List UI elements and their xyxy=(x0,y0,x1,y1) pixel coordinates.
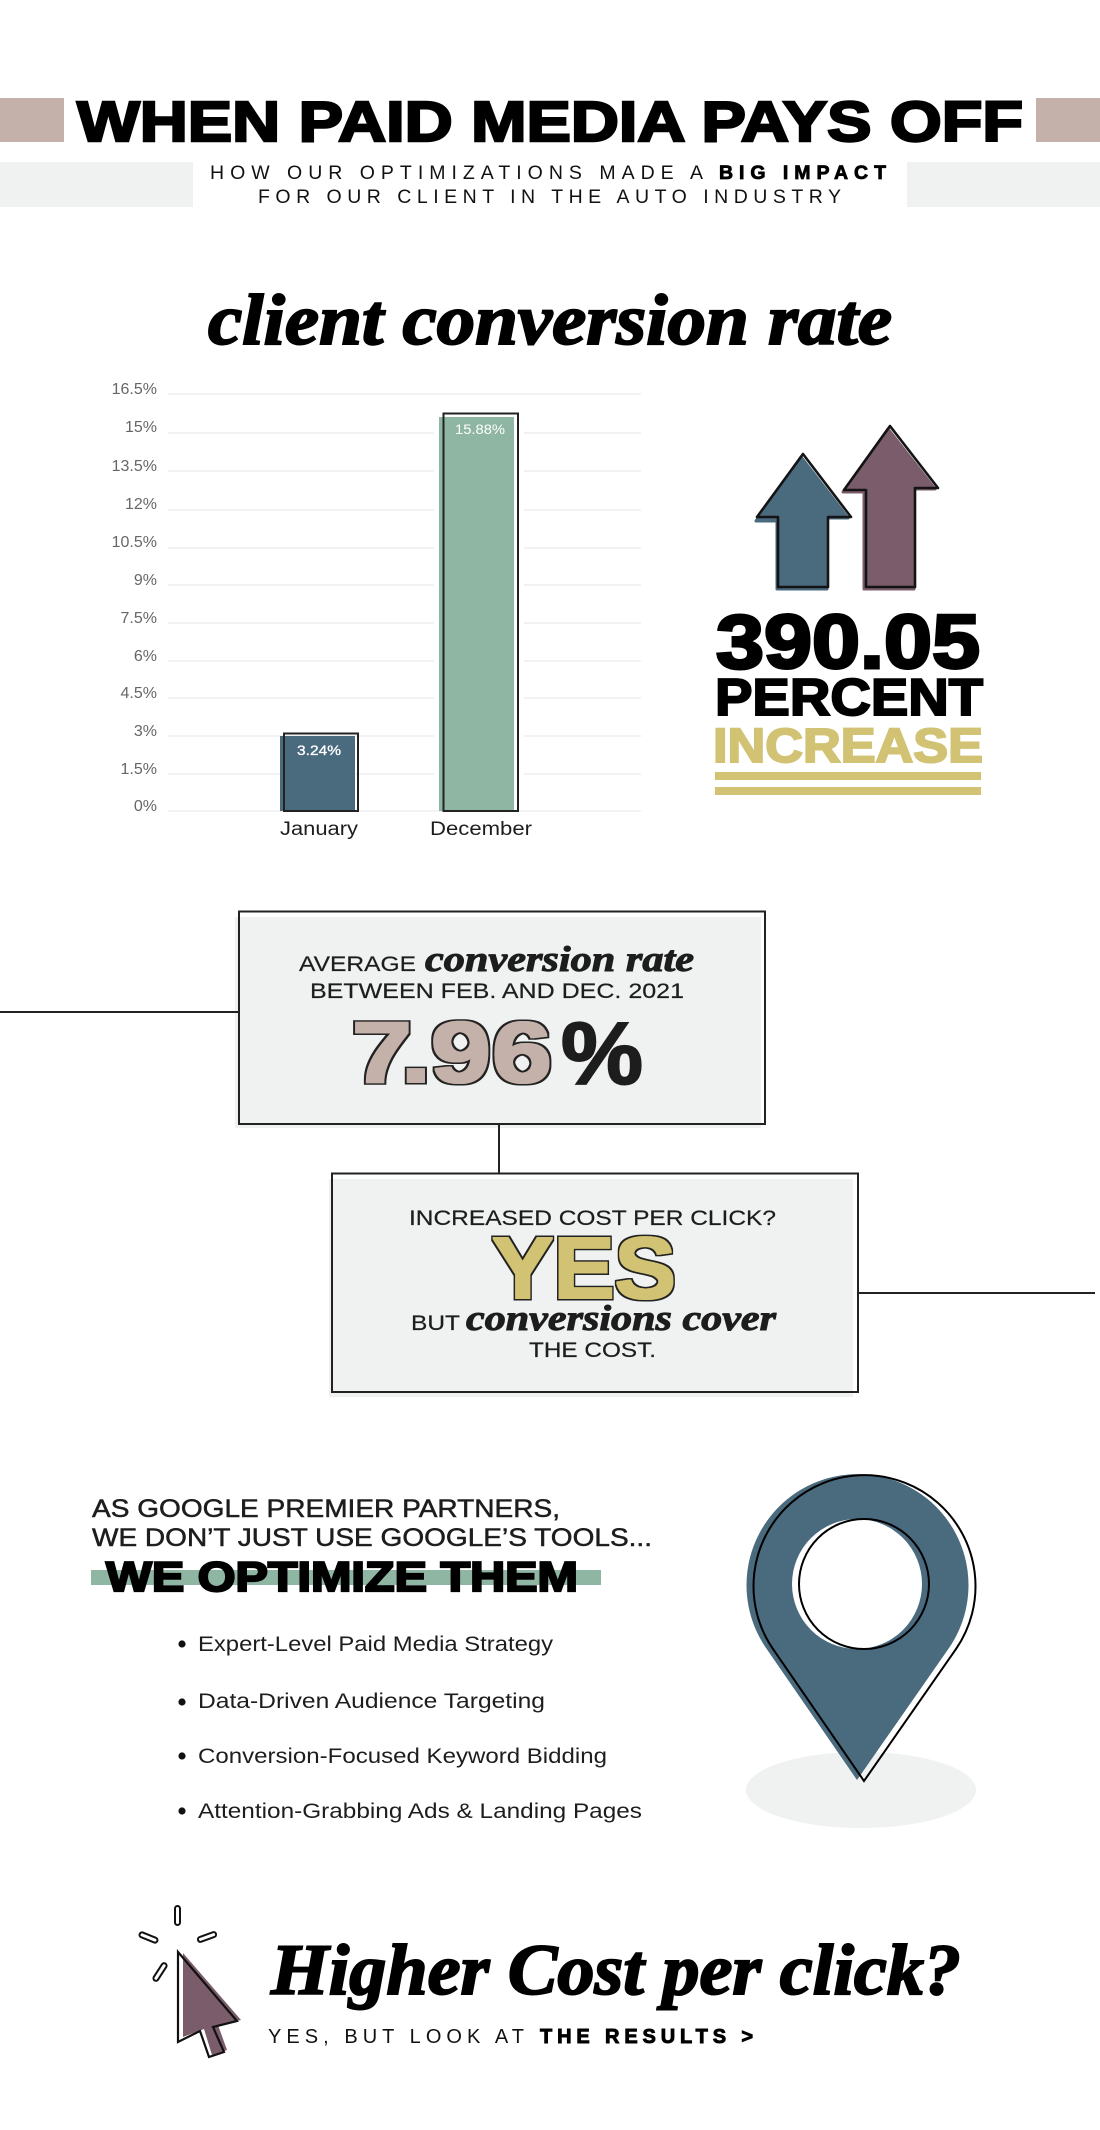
icon: blue arrow xyxy=(756,454,851,589)
x axis labels xyxy=(280,819,533,840)
call to action subtext: THE RESULTS > xyxy=(540,2026,753,2048)
bullet list: Data-Driven Audience Targeting xyxy=(198,1689,545,1713)
y axis labels: 12% xyxy=(125,496,157,513)
stat number: 390.05 xyxy=(716,600,980,685)
highlight bar xyxy=(91,1570,601,1585)
stat: 7.96%: 7.96 xyxy=(352,1004,552,1101)
panel question: INCREASED COST PER CLICK? xyxy=(409,1207,776,1230)
subtitle: HOW OUR OPTIMIZATIONS MADE A xyxy=(210,162,703,184)
bar chart: client conversion rate xyxy=(112,381,641,840)
panel conclusion xyxy=(411,1298,777,1362)
y axis gridlines xyxy=(168,394,641,811)
intro text xyxy=(92,1495,652,1552)
panel: increased cost per click xyxy=(329,1174,858,1397)
panel: average conversion rate xyxy=(235,912,765,1128)
bullet list xyxy=(178,1632,642,1823)
y axis labels xyxy=(112,381,157,815)
y axis labels: 4.5% xyxy=(121,685,157,702)
header band xyxy=(0,90,1100,208)
stat: 7.96% xyxy=(352,1004,643,1103)
panel text: BETWEEN FEB. AND DEC. 2021 xyxy=(310,980,684,1003)
cursor outline xyxy=(178,1952,237,2057)
icon: purple arrow xyxy=(843,426,938,589)
intro text: AS GOOGLE PREMIER PARTNERS, xyxy=(92,1495,560,1523)
pin hole outline xyxy=(799,1519,929,1649)
subtitle band: left xyxy=(0,162,193,207)
y axis labels: 1.5% xyxy=(121,761,157,778)
panel conclusion: THE COST. xyxy=(529,1339,656,1362)
bar: January 3.24% xyxy=(280,734,358,811)
stat label: increase: INCREASE xyxy=(713,720,983,773)
section: google premier partners xyxy=(91,1495,652,1823)
pin shadow xyxy=(746,1752,976,1828)
subtitle: FOR OUR CLIENT IN THE AUTO INDUSTRY xyxy=(258,186,841,208)
panel conclusion: conversions cover xyxy=(466,1298,777,1338)
subtitle band: right xyxy=(907,162,1100,207)
title accent bar: left xyxy=(0,98,64,142)
y axis labels: 7.5% xyxy=(121,610,157,627)
y axis labels: 9% xyxy=(134,572,157,589)
call to action subtext: YES, BUT LOOK AT xyxy=(268,2026,524,2048)
heading: we optimize them: WE OPTIMIZE THEM xyxy=(106,1553,578,1600)
call to action heading: Higher Cost per click? xyxy=(270,1930,961,2010)
answer: yes: YES xyxy=(492,1220,676,1317)
click sparks xyxy=(139,1906,217,1982)
bar: December 15.88%: 15.88% xyxy=(455,421,505,437)
y axis labels: 13.5% xyxy=(112,458,157,475)
call to action subtext xyxy=(268,2026,753,2048)
x axis labels: January xyxy=(280,819,359,840)
stat label: percent: PERCENT xyxy=(715,669,983,727)
y axis labels: 15% xyxy=(125,419,157,436)
connector: left line into first box xyxy=(0,1011,239,1013)
double underline xyxy=(715,772,981,795)
panel text xyxy=(299,939,694,1003)
subtitle xyxy=(210,162,886,208)
y axis labels: 0% xyxy=(134,798,157,815)
pin outline xyxy=(754,1475,976,1781)
x axis labels: December xyxy=(430,819,533,840)
bar: December 15.88% xyxy=(439,414,518,811)
y axis labels: 16.5% xyxy=(112,381,157,398)
cursor fill xyxy=(183,1953,241,2055)
panel conclusion: BUT xyxy=(411,1312,460,1335)
bullet list: Attention-Grabbing Ads & Landing Pages xyxy=(198,1799,642,1823)
bar: January 3.24%: 3.24% xyxy=(297,742,341,758)
stat: 7.96%: % xyxy=(561,1004,643,1103)
pin fill xyxy=(746,1474,968,1780)
subtitle: BIG IMPACT xyxy=(719,162,886,184)
y axis labels: 6% xyxy=(134,648,157,665)
title accent bar: right xyxy=(1036,98,1100,142)
icon: two up arrows xyxy=(756,426,938,589)
icon: location pin xyxy=(746,1474,976,1828)
stat: 390.05 percent increase xyxy=(713,600,983,795)
panel text: AVERAGE xyxy=(299,953,416,976)
bullet list: Expert-Level Paid Media Strategy xyxy=(198,1632,553,1656)
panel text: conversion rate xyxy=(425,939,694,979)
intro text: WE DON’T JUST USE GOOGLE’S TOOLS... xyxy=(92,1524,652,1552)
connector: line between boxes xyxy=(498,1124,500,1173)
bullet list: Conversion-Focused Keyword Bidding xyxy=(198,1744,607,1768)
y axis labels: 10.5% xyxy=(112,534,157,551)
icon: mouse cursor with click sparks xyxy=(139,1906,241,2057)
title: WHEN PAID MEDIA PAYS OFF xyxy=(77,90,1023,154)
connector: right line out of second box xyxy=(858,1292,1095,1294)
y axis labels: 3% xyxy=(134,723,157,740)
heading: client conversion rate: client conversion rate xyxy=(208,280,892,360)
